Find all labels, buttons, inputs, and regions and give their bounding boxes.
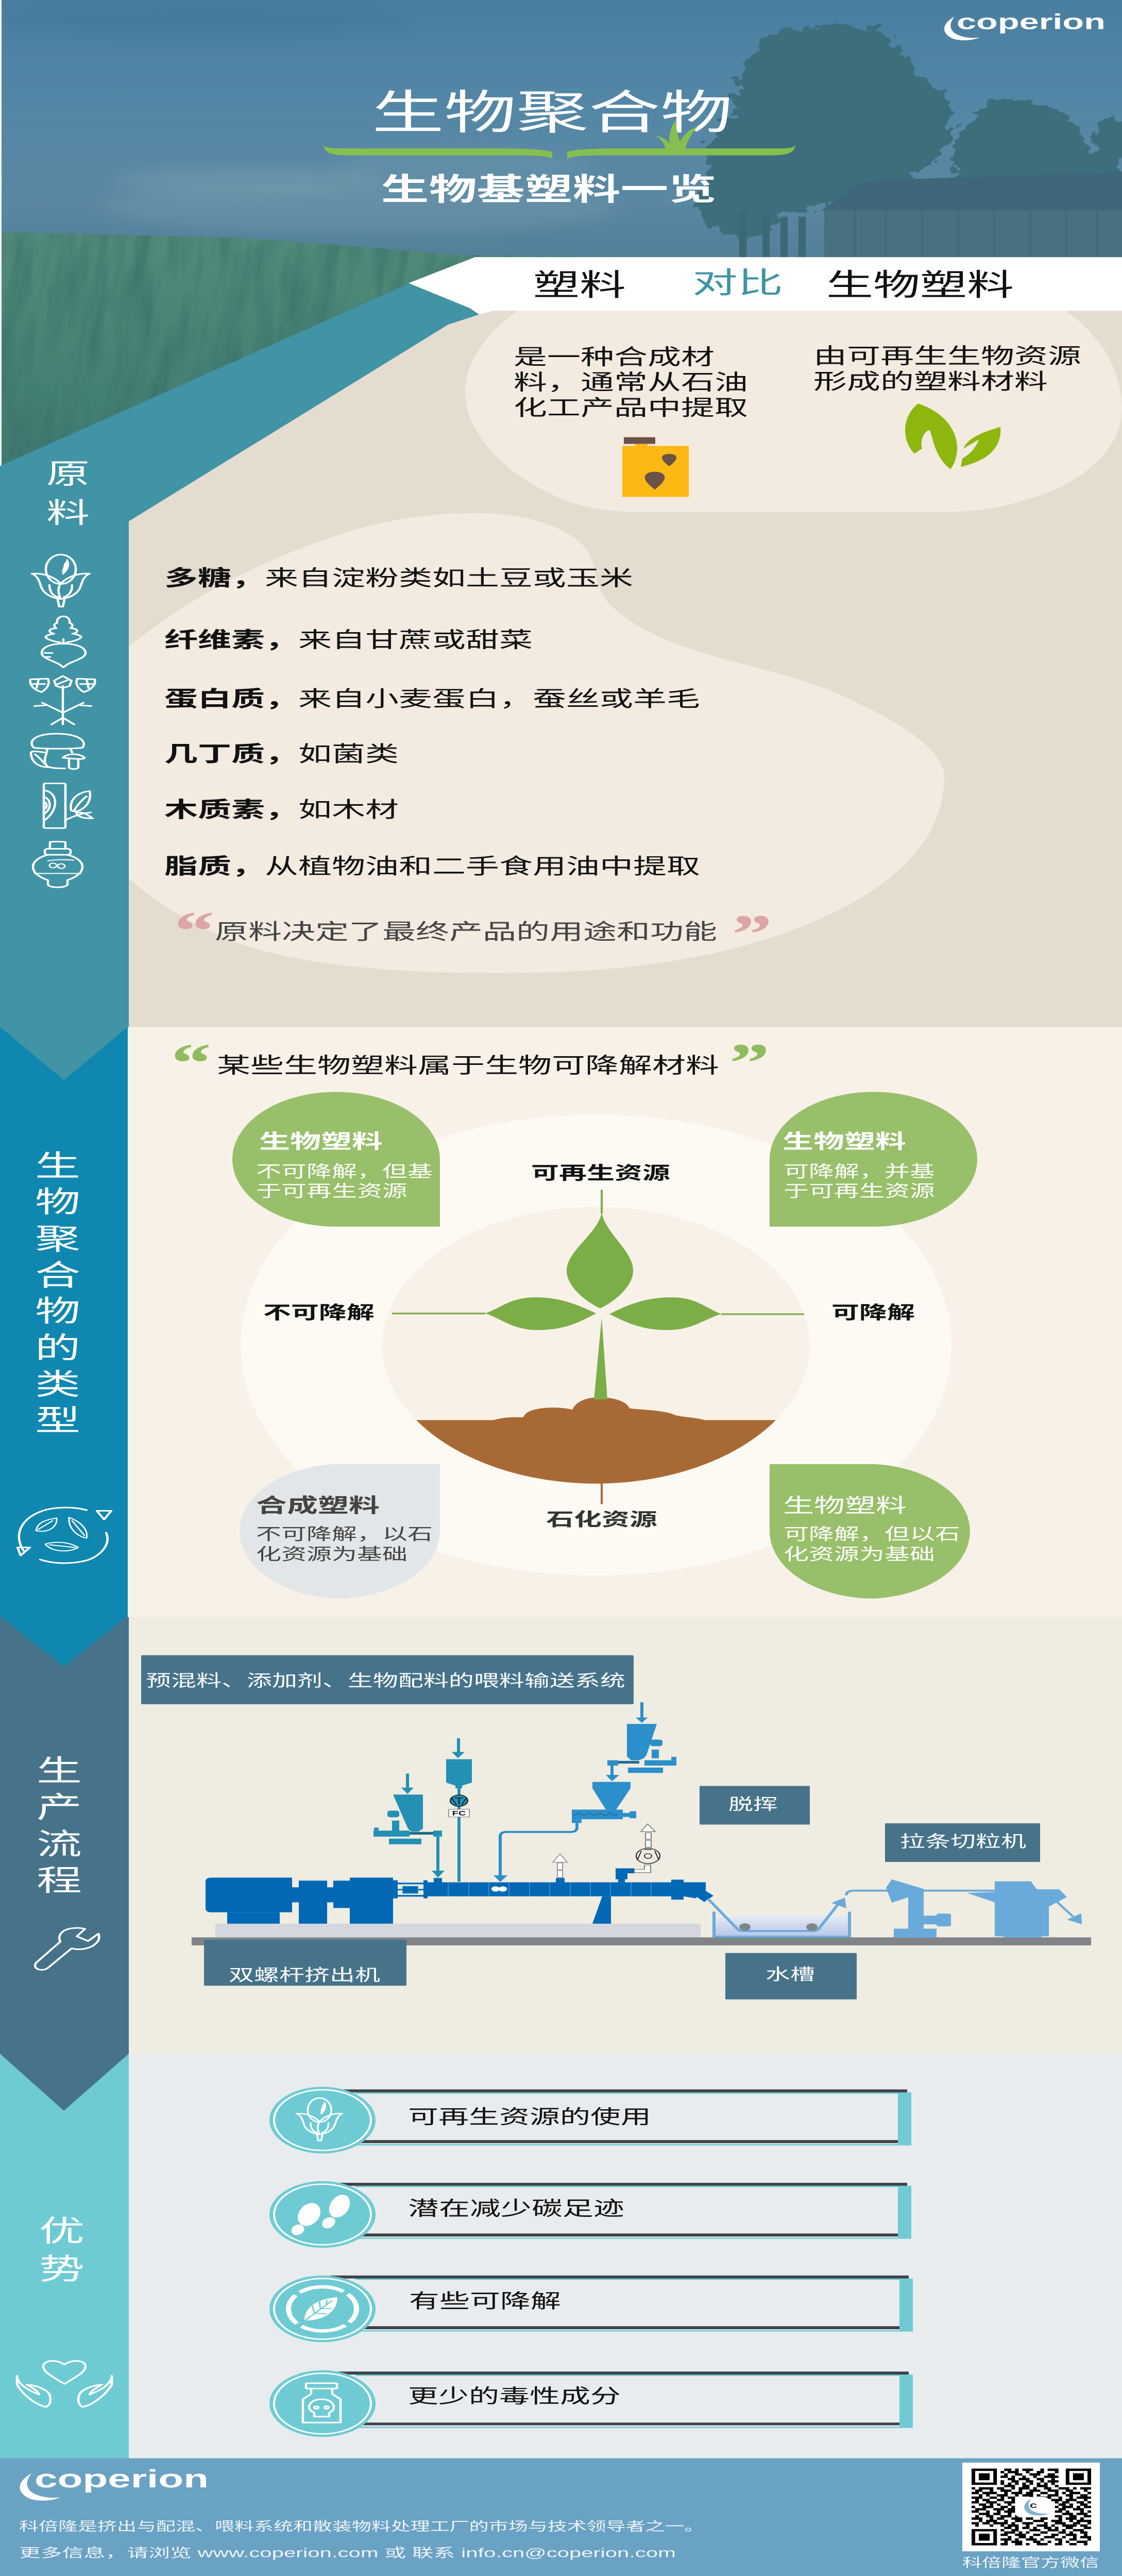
light blob behind raw materials list	[129, 513, 944, 973]
side heading: advantages: 优	[39, 2215, 84, 2247]
side heading: advantages: 势	[39, 2252, 84, 2285]
axis label: fossil: 石化资源	[546, 1510, 657, 1530]
quote: raw materials: ”	[727, 904, 770, 965]
banner label: bioplastics: 生物塑料	[826, 268, 1014, 302]
row: fewer toxic ingredients	[269, 2370, 913, 2437]
root line	[601, 1483, 603, 1504]
side heading: production: 产	[37, 1791, 82, 1824]
side heading: polymer types: 类	[35, 1368, 80, 1401]
QR code: c	[1030, 2500, 1037, 2510]
raw materials list	[164, 566, 700, 878]
header photo background	[2, 0, 1122, 465]
row: renewable resources: 可再生资源的使用	[408, 2106, 651, 2128]
card: bioplastic non-degradable renewable: 不可降解，但基	[256, 1162, 433, 1180]
label: strand pelletizer	[885, 1823, 1040, 1862]
label: devolatilization: 脱挥	[728, 1795, 778, 1814]
section heading: raw materials	[46, 458, 90, 529]
icon: oil bottle	[33, 842, 82, 887]
QR caption: 科倍隆官方微信	[962, 2555, 1099, 2570]
water bath	[708, 1897, 849, 1937]
side heading: production: 流	[37, 1828, 82, 1860]
title: 生物聚合物	[372, 87, 733, 139]
card: bioplastic degradable renewable: 生物塑料	[783, 1130, 906, 1153]
feeder: gravimetric left	[373, 1774, 445, 1877]
banner label: versus: 对比	[692, 266, 783, 299]
subtitle: 生物基塑料一览	[381, 172, 716, 207]
plastics description: 是一种合成材	[514, 345, 715, 369]
card: synthetic plastic: 不可降解，以石	[256, 1525, 433, 1544]
icon: poison bottle	[303, 2383, 341, 2422]
side heading: polymer types: 的	[35, 1331, 80, 1364]
soil	[416, 1397, 776, 1484]
quote: biodegradable	[167, 1032, 767, 1093]
item: polysaccharides: 多糖，来自淀粉类如土豆或玉米	[164, 566, 633, 590]
row: carbon footprint: 潜在减少碳足迹	[408, 2197, 624, 2220]
icon: wood and leaf	[44, 784, 93, 828]
item: protein: 蛋白质，来自小麦蛋白，蚕丝或羊毛	[164, 687, 700, 711]
section: polymer types	[0, 1027, 1122, 1618]
icon: corn	[32, 555, 90, 606]
plastics description: 化工产品中提取	[514, 396, 748, 420]
label: water bath: 水槽	[766, 1965, 815, 1984]
row: biodegradable	[269, 2276, 913, 2342]
bioplastics description: 由可再生生物资源	[813, 344, 1081, 368]
logo: coperion footer	[20, 2464, 209, 2501]
card: bioplastic degradable renewable	[770, 1092, 977, 1227]
company statement: 科倍隆是挤出与配混、喂料系统和散装物料处理工厂的市场与技术领导者之一。	[19, 2519, 704, 2533]
card: bioplastic degradable fossil: 可降解，但以石	[784, 1525, 960, 1544]
arrow: section pointer	[0, 1616, 128, 1667]
contact line: 更多信息，请浏览 www.coperion.com 或 联系 info.cn@coperion.com	[19, 2546, 676, 2560]
side heading: polymer types: 物	[35, 1185, 80, 1218]
card: bioplastic degradable renewable: 于可再生资源	[784, 1182, 935, 1200]
teal diagonal band	[0, 284, 479, 1029]
item: lignin: 木质素，如木材	[164, 798, 399, 822]
side heading: polymer types: 聚	[35, 1223, 80, 1256]
side heading: polymer types: 物	[35, 1295, 80, 1328]
icon: wrench	[35, 1928, 99, 1970]
icon: footprints	[290, 2193, 353, 2236]
process floor	[192, 1937, 1091, 1945]
banner label: plastics: 塑料	[533, 268, 626, 302]
side heading: polymer types: 合	[35, 1259, 80, 1292]
QR code	[962, 2463, 1100, 2551]
axis label: non-degradable: 不可降解	[263, 1303, 375, 1323]
side heading: polymer types	[35, 1149, 80, 1437]
icon: leaf in ring	[275, 2278, 370, 2340]
logo: coperion top: coperion	[957, 9, 1106, 34]
quote: raw materials	[170, 901, 770, 965]
card: bioplastic degradable fossil: 化资源为基础	[784, 1545, 935, 1563]
icon: mushrooms	[31, 734, 84, 769]
row: fewer toxic ingredients: 更少的毒性成分	[408, 2385, 621, 2407]
feeder: liquid with pump	[446, 1738, 472, 1882]
label: water bath	[725, 1953, 857, 1999]
quote: raw materials: “	[170, 901, 212, 961]
side bar: polymer types	[0, 1027, 128, 1618]
icon: recycling leaves	[18, 1507, 111, 1563]
side heading: production: 生	[37, 1754, 82, 1787]
quote: biodegradable: “	[167, 1032, 209, 1093]
row: renewable resources	[269, 2087, 911, 2154]
logo: coperion footer: coperion	[35, 2464, 209, 2493]
label: twin screw extruder: 双螺杆挤出机	[229, 1966, 380, 1984]
side heading: polymer types: 生	[35, 1149, 80, 1182]
section: production process	[0, 1616, 1122, 2054]
icon: oil can	[622, 437, 689, 497]
card: bioplastic non-degradable renewable: 生物塑料	[259, 1130, 383, 1153]
icon: beet	[42, 616, 86, 667]
feeder: side feeder	[494, 1702, 676, 1882]
side bar: advantages	[0, 2054, 129, 2458]
label: devolatilization	[700, 1786, 810, 1825]
quote: biodegradable: 某些生物塑料属于生物可降解材料	[217, 1053, 719, 1078]
side heading: production: 程	[37, 1864, 82, 1897]
footer	[0, 2458, 1122, 2576]
axis label: renewable: 可再生资源	[531, 1163, 670, 1183]
icon: heart in hands	[17, 2361, 112, 2407]
strand pelletizer drawing	[846, 1879, 1082, 1938]
comparison banner	[409, 257, 1122, 314]
row: carbon footprint	[269, 2181, 911, 2248]
plastics description: 料，通常从石油	[514, 370, 748, 395]
card: synthetic plastic: 合成塑料	[256, 1494, 380, 1517]
axis label: degradable: 可降解	[831, 1303, 915, 1323]
vent 2 with vacuum pump	[634, 1824, 660, 1873]
icon: wheat sprig	[30, 676, 95, 724]
label: twin screw extruder	[204, 1940, 406, 1986]
title ribbon with grass	[324, 120, 795, 159]
arrow: vent 1	[553, 1854, 567, 1877]
extruder base	[215, 1924, 701, 1937]
quote: biodegradable: ”	[725, 1032, 767, 1093]
inner circle	[382, 1207, 810, 1484]
card: synthetic plastic: 化资源为基础	[256, 1545, 407, 1563]
icon: leaves	[905, 403, 1000, 469]
card: synthetic plastic	[240, 1464, 440, 1599]
label: feeding system	[141, 1655, 634, 1704]
section background: raw materials	[129, 311, 1122, 1027]
card: bioplastic non-degradable renewable: 于可再生资源	[256, 1182, 407, 1200]
row: biodegradable: 有些可降解	[409, 2290, 561, 2312]
label: strand pelletizer: 拉条切粒机	[900, 1832, 1026, 1851]
feeder: liquid with pump: FC	[452, 1810, 466, 1817]
arrow: section pointer	[0, 1027, 128, 1080]
twin screw extruder drawing	[206, 1868, 713, 1924]
section heading: raw materials: 原	[46, 458, 90, 489]
icon: corn	[297, 2098, 342, 2141]
item: chitin: 几丁质，如菌类	[164, 741, 399, 766]
card: bioplastic degradable renewable: 可降解，并基	[784, 1162, 935, 1180]
outer circle	[241, 1114, 951, 1575]
logo: coperion top	[944, 9, 1106, 40]
bioplastics description: 形成的塑料材料	[813, 369, 1048, 394]
card: bioplastic degradable fossil	[770, 1464, 970, 1599]
card: bioplastic non-degradable renewable	[232, 1092, 440, 1227]
side heading: production	[37, 1754, 82, 1897]
item: lipids: 脂质，从植物油和二手食用油中提取	[164, 854, 700, 878]
plant	[392, 1190, 804, 1399]
side bar: production	[0, 1617, 129, 2054]
card: bioplastic degradable fossil: 生物塑料	[783, 1494, 907, 1517]
label: feeding system: 预混料、添加剂、生物配料的喂料输送系统	[146, 1671, 625, 1690]
light blob behind comparison	[465, 311, 1122, 512]
arrow: section pointer	[0, 2054, 129, 2111]
side heading: advantages	[39, 2215, 84, 2285]
item: cellulose: 纤维素，来自甘蔗或甜菜	[164, 628, 533, 652]
section heading: raw materials: 料	[46, 497, 90, 529]
quote: raw materials: 原料决定了最终产品的用途和功能	[215, 919, 717, 944]
side heading: polymer types: 型	[35, 1404, 80, 1437]
section: advantages	[0, 2054, 1122, 2458]
